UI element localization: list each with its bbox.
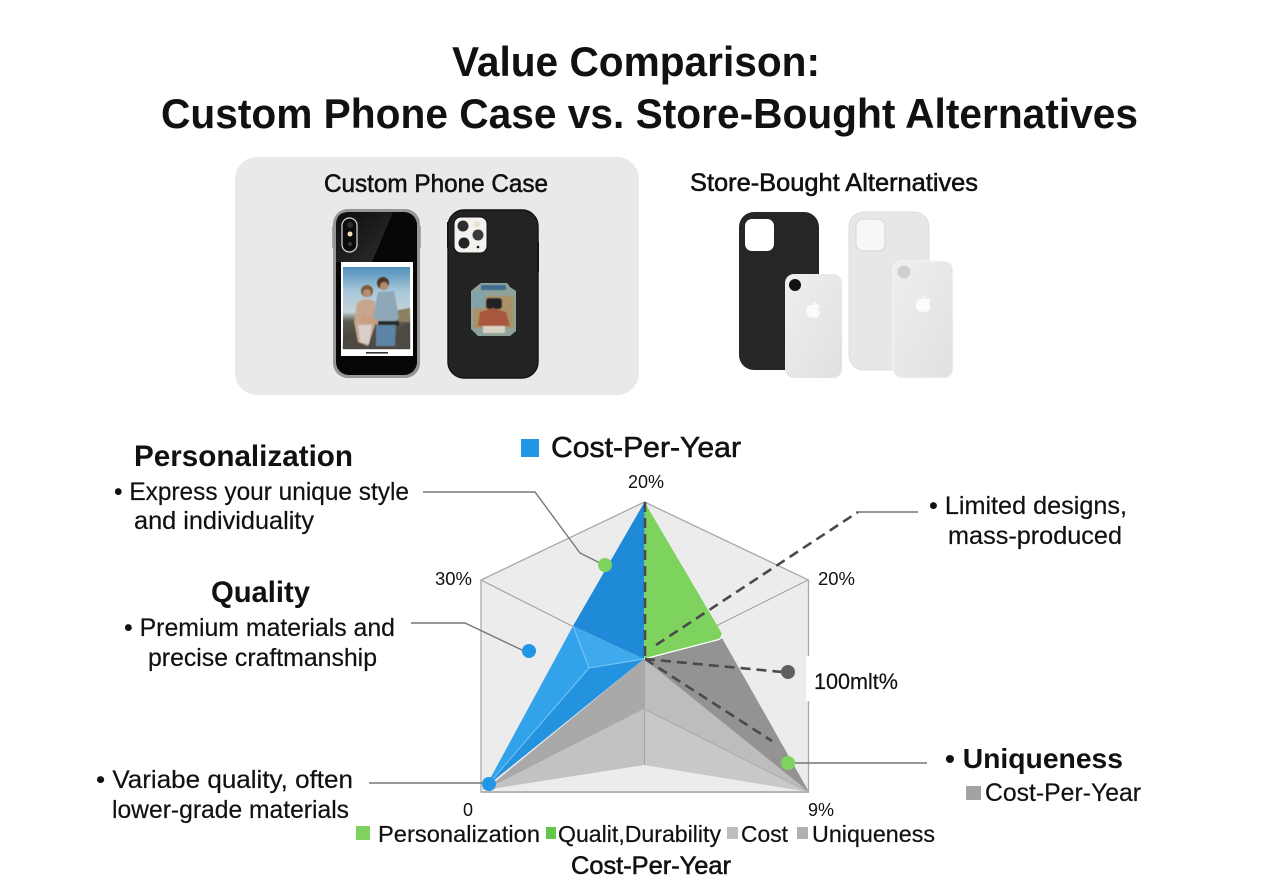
callout: quality: [124, 576, 536, 672]
case: white: [849, 212, 929, 370]
legend: bottom: Personalization: [378, 821, 540, 847]
legend: bottom: Qualit,Durability: [558, 821, 721, 847]
callout: limited designs: [858, 492, 1127, 550]
axis labels: 0: [463, 800, 473, 820]
dashed guide lines: [645, 502, 858, 741]
heading: store-bought alternatives: Store-Bought Alternatives: [690, 169, 978, 197]
callout: quality: precise craftmanship: [148, 644, 377, 672]
chart background: [481, 502, 808, 792]
legend: bottom: [356, 821, 935, 847]
grey area: lower layers: [485, 638, 809, 792]
green area: [644, 502, 722, 659]
value label: 100mlt%: [806, 656, 898, 701]
callout: personalization: and individuality: [134, 507, 314, 535]
callout: personalization: Personalization: [134, 440, 353, 473]
case: small white right: [893, 261, 953, 378]
callout: uniqueness: Cost-Per-Year: [985, 779, 1141, 807]
radar chart: [435, 472, 898, 820]
panel: store-bought alternatives: [690, 169, 978, 378]
title: [161, 38, 1138, 137]
callout: quality: Quality: [211, 576, 310, 609]
icon: apple logo: [916, 295, 931, 312]
callout: uniqueness: [781, 743, 1141, 807]
callout: personalization: • Express your unique style: [114, 478, 409, 506]
photo print: [341, 262, 413, 356]
marker: 100mlt% point: [781, 665, 795, 679]
legend: cost-per-year top: Cost-Per-Year: [551, 432, 741, 464]
title: Value Comparison:: [452, 38, 820, 85]
callout: quality: • Premium materials and: [124, 614, 395, 642]
callout: limited designs: mass-produced: [948, 522, 1122, 550]
callout: variable quality: • Variabe quality, often: [96, 766, 353, 794]
legend: bottom: Uniqueness: [812, 821, 935, 847]
case: black: [739, 212, 819, 370]
axis labels: 20%: [818, 569, 855, 589]
phone: custom sticker case: [447, 210, 539, 378]
axis labels: 30%: [435, 569, 472, 589]
title: Custom Phone Case vs. Store-Bought Alternatives: [161, 90, 1138, 137]
axis labels: 20%: [628, 472, 664, 492]
callout: limited designs: • Limited designs,: [929, 492, 1127, 520]
callout: uniqueness: • Uniqueness: [945, 743, 1123, 774]
legend: bottom: Cost: [741, 821, 789, 847]
blue area: [482, 502, 644, 790]
heading: custom phone case: Custom Phone Case: [324, 170, 548, 198]
callout: variable quality: lower-grade materials: [112, 796, 349, 824]
axis labels: 9%: [808, 800, 834, 820]
case: small white front: [785, 274, 842, 378]
panel: custom phone case: [235, 157, 639, 395]
value label: 100mlt%: 100mlt%: [814, 669, 898, 694]
icon: apple logo: [806, 301, 820, 318]
axis title: cost-per-year: Cost-Per-Year: [571, 852, 731, 880]
sticker artwork: [471, 283, 516, 336]
phone: custom photo case: [332, 209, 421, 378]
callout: personalization: [114, 440, 612, 572]
callout: variable quality: [96, 766, 496, 824]
axis labels: [435, 472, 855, 820]
